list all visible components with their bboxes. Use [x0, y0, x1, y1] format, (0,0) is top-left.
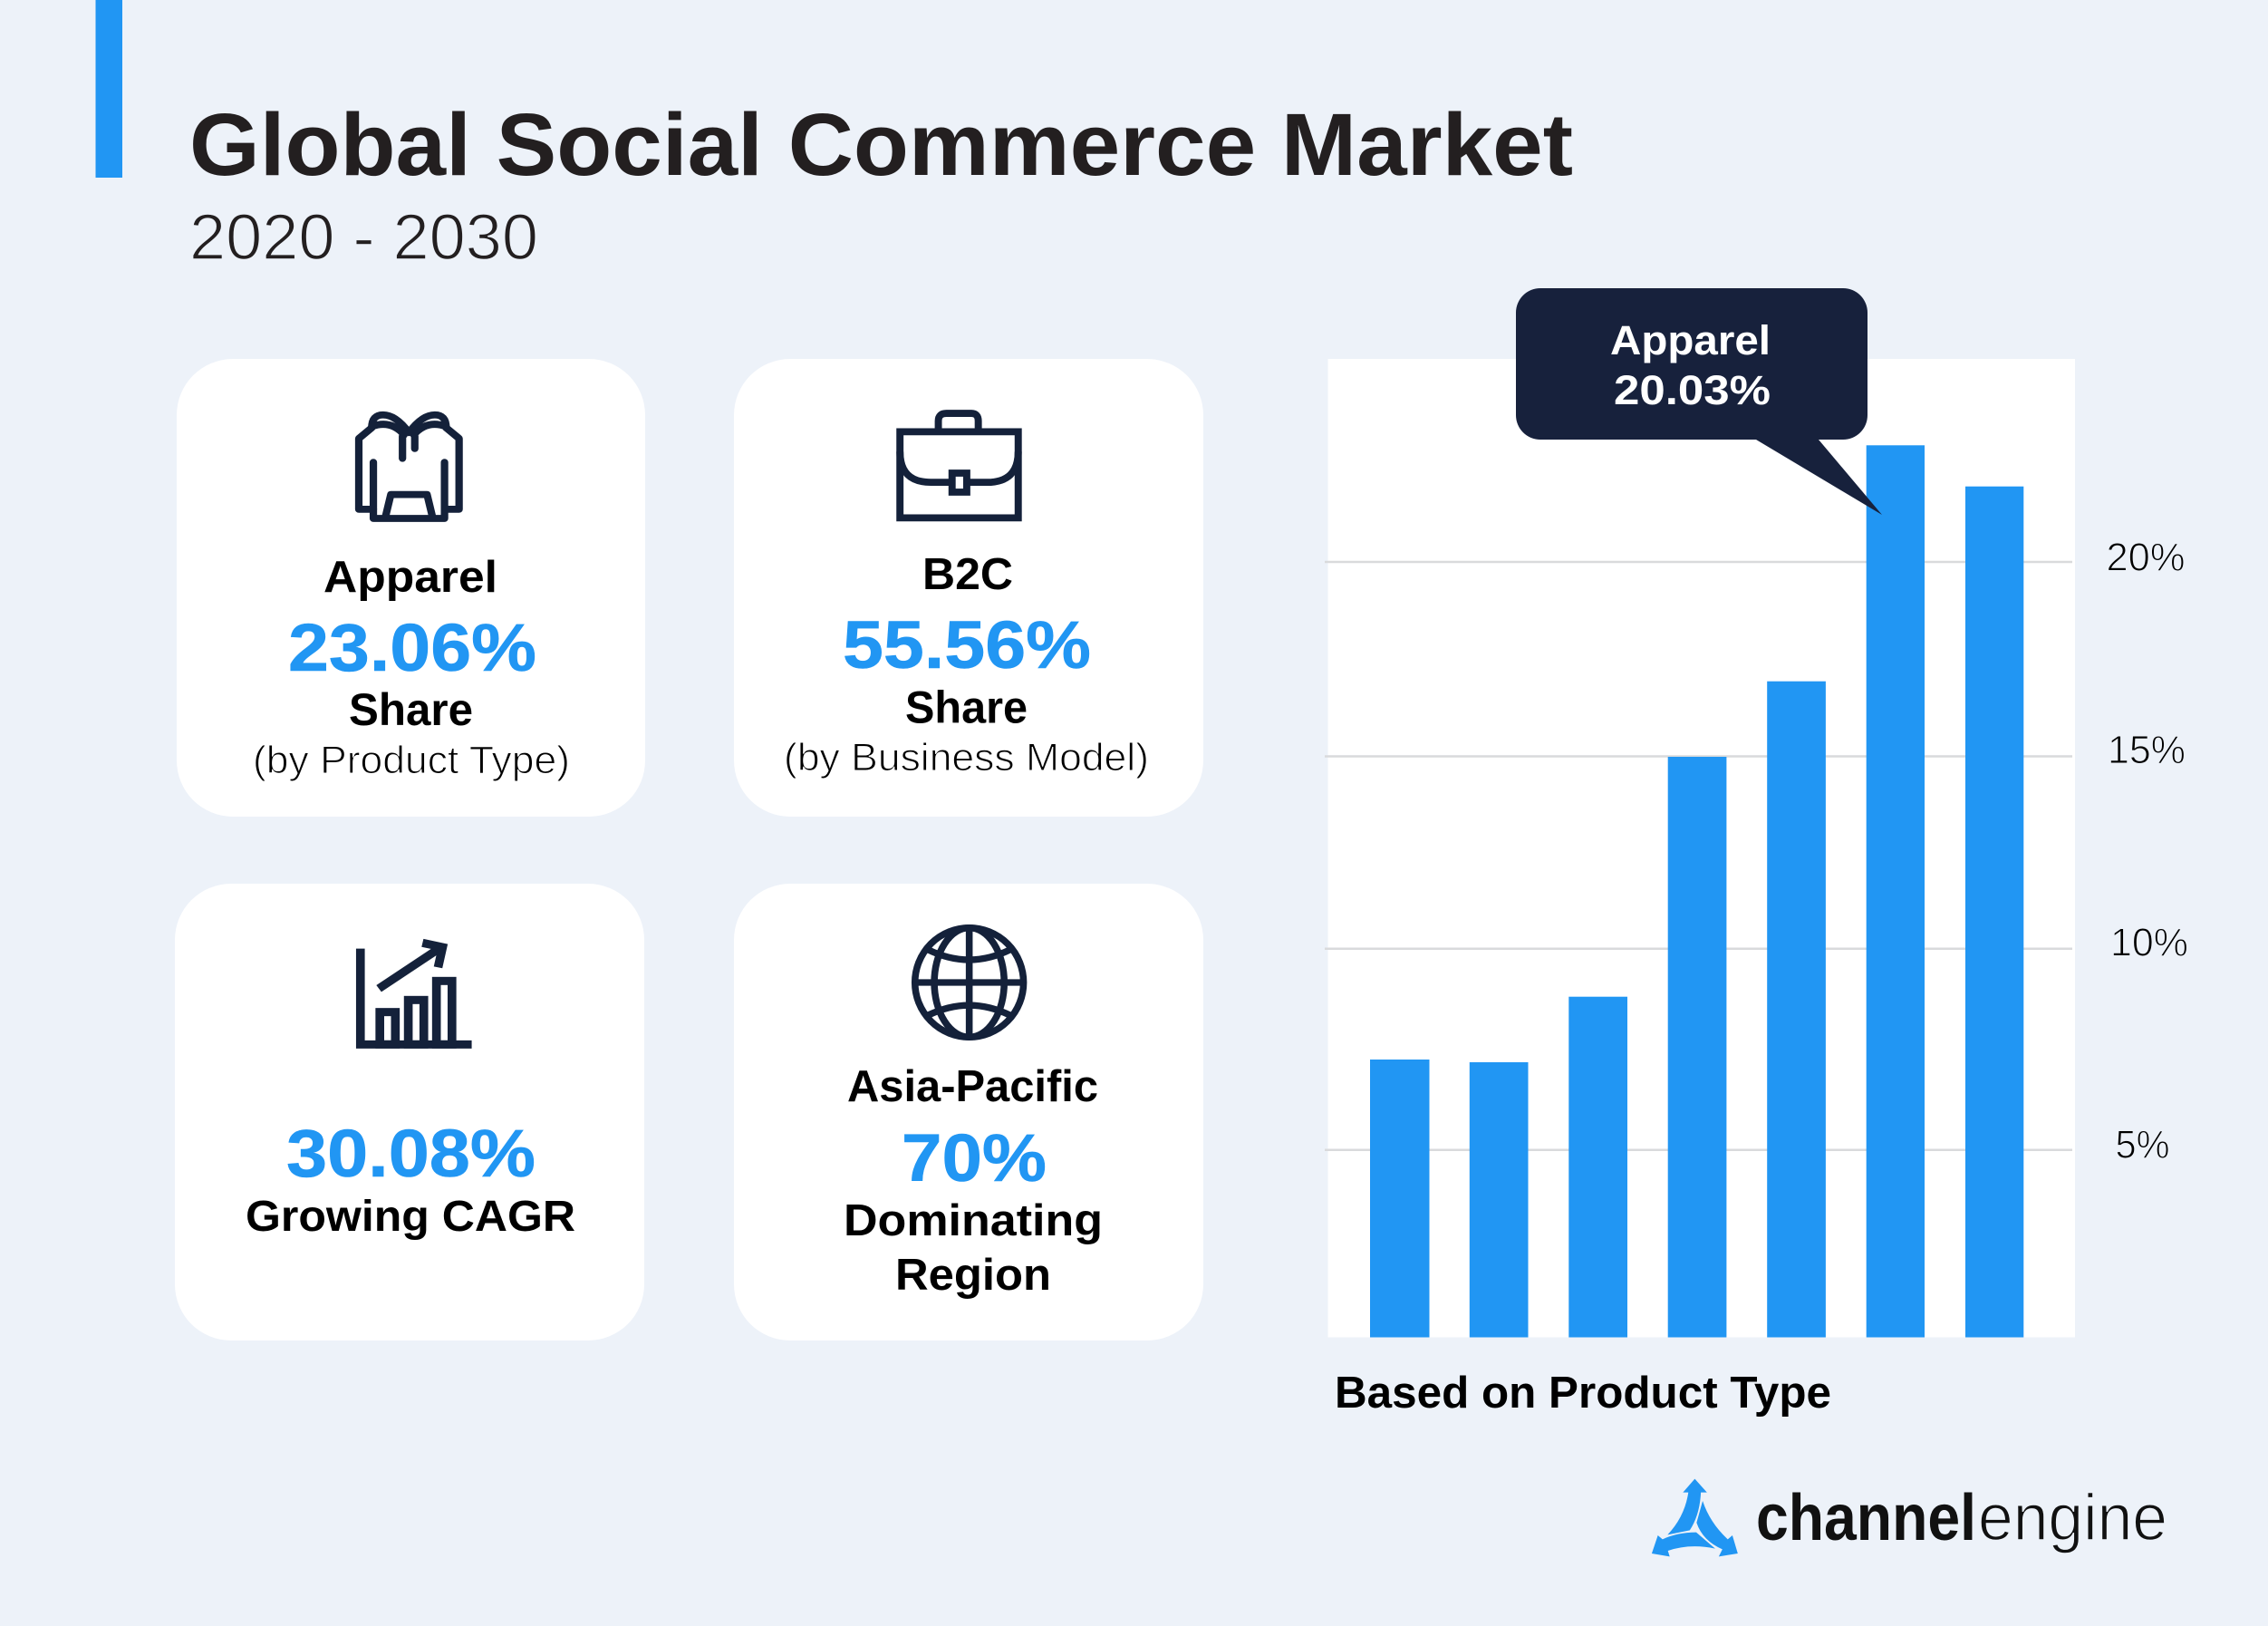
panel: Asia-Pacific [734, 884, 1203, 1340]
value: 30.08% [286, 1116, 536, 1191]
basis label: (by Business Model) [784, 736, 1149, 779]
category label: B2C [922, 550, 1013, 599]
CAGR label: Growing CAGR [246, 1193, 575, 1241]
category label: Apparel [323, 553, 497, 602]
region word: Region [895, 1251, 1051, 1300]
icon: three arrows [1652, 1479, 1738, 1556]
value: 23.06% [288, 610, 536, 685]
panel: B2C share [734, 359, 1203, 817]
callout label: Apparel [1610, 317, 1771, 363]
share label: Share [349, 684, 473, 735]
basis label: (by Product Type) [253, 739, 570, 782]
axis labels: 15% [2108, 728, 2186, 772]
bars [1370, 445, 2023, 1338]
icon: briefcase [900, 413, 1018, 518]
axis labels: 20% [2106, 535, 2186, 579]
bar chart [1325, 359, 2188, 1338]
accent bar [96, 0, 122, 178]
axis labels: 5% [2115, 1122, 2169, 1166]
wordmark light: engine [1978, 1482, 2167, 1554]
icon: growth chart [361, 943, 472, 1044]
wordmark: channel [1756, 1482, 1976, 1554]
chart caption: Based on Product Type [1335, 1369, 1831, 1418]
subtitle: 2020 - 2030 [189, 202, 538, 274]
icon: globe [913, 927, 1025, 1038]
logo: channelengine [1652, 1479, 2167, 1556]
dominating label: Dominating [844, 1196, 1103, 1245]
region label: Asia-Pacific [847, 1062, 1098, 1111]
panel: apparel share [177, 359, 645, 817]
value: 70% [902, 1120, 1047, 1195]
axis labels: 10% [2110, 921, 2188, 965]
icon: hoodie [359, 415, 459, 518]
callout: apparel 20.03% [1516, 288, 1882, 515]
callout value: 20.03% [1614, 367, 1771, 413]
axis labels [2106, 535, 2188, 1166]
value: 55.56% [843, 607, 1091, 682]
title: Global Social Commerce Market [189, 95, 1573, 194]
panel: CAGR [175, 884, 644, 1340]
share label: Share [905, 682, 1028, 732]
